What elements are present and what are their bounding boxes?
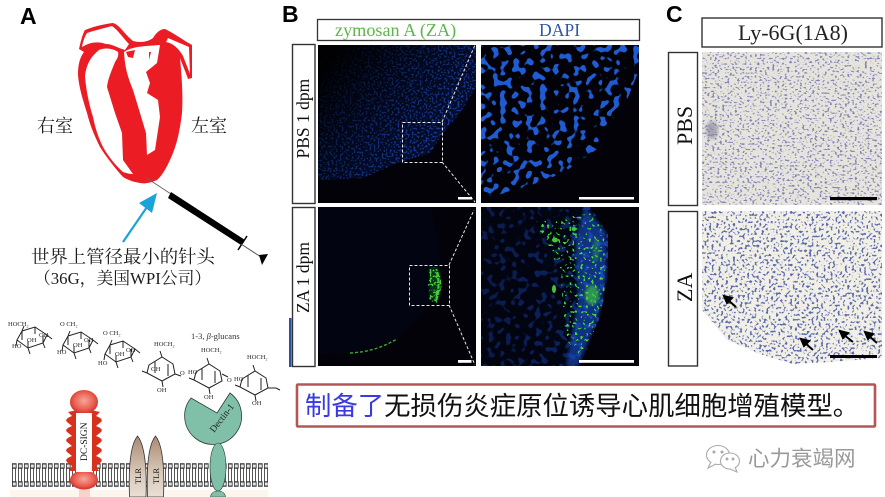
micrograph: PBS DAPI high magnification [481,45,639,203]
row label: ZA 1 dpm [289,208,315,367]
chemical structure: 1-3 beta-glucans: O CH₂ [103,330,121,337]
icon: chat bubbles [706,446,740,472]
chemical structure: 1-3 beta-glucans: OH [157,387,167,394]
watermark: 心力衰竭网 [748,447,856,471]
icon: syringe [145,177,268,265]
receptor: TLR: TLR [151,468,161,484]
chemical structure: 1-3 beta-glucans: OH [115,351,125,358]
arrows: positive cells [724,296,877,350]
chemical structure: 1-3 beta-glucans: HO [188,369,198,376]
chemical structure: 1-3 beta-glucans: OH [151,366,161,373]
chemical structure: 1-3 beta-glucans: 1-3, β-glucans [191,331,240,341]
cell membrane lipid bilayer [10,466,268,497]
row label: ZA [668,212,698,366]
chemical structure: 1-3 beta-glucans: OH [252,400,262,407]
row label: PBS: PBS [672,106,697,145]
chemical structure: 1-3 beta-glucans: HO [57,349,67,356]
zoom box and guide lines [402,45,475,202]
scale bar [458,360,472,363]
panel: beta-glucan receptors [8,321,280,497]
row label: ZA: ZA [672,273,697,302]
icon: heart cross-section [78,23,192,183]
chemical structure: 1-3 beta-glucans: O CH₂ [60,321,78,328]
chemical structure: 1-3 beta-glucans: OH [126,347,136,354]
panel B: fluorescence microscopy [282,1,640,367]
caption [31,247,216,288]
callout: conclusion [297,384,875,426]
chemical structure: 1-3 beta-glucans: O [180,370,185,377]
micrograph: Ly-6G PBS [702,52,882,205]
receptor: Dectin-1 [185,393,242,497]
label: right ventricle: 右室 [37,116,73,136]
chemical structure: 1-3 beta-glucans: OH [204,394,214,401]
receptor: DC-SIGN [66,390,102,497]
chemical structure: 1-3 beta-glucans: HO [98,360,108,367]
chemical structure: 1-3 beta-glucans: HOCH₂ [154,341,175,348]
zoom box and guide lines [410,210,475,365]
panel A: heart injection [20,3,268,288]
arrow: points to needle [123,193,157,242]
chemical structure: 1-3 beta-glucans: HO [12,343,22,350]
chemical structure: 1-3 beta-glucans: OH [27,337,37,344]
caption: （36G，美国WPI公司） [34,269,211,288]
green signal [350,266,442,354]
scale bar [830,197,877,200]
chemical structure: 1-3 beta-glucans: OH [73,342,83,349]
chemical structure: 1-3 beta-glucans: OH [84,337,94,344]
column header: Ly-6G(1A8): Ly-6G(1A8) [738,20,848,45]
scale bar [579,360,634,363]
micrograph: PBS low magnification [318,45,476,203]
chemical structure: 1-3 beta-glucans: HOCH₂ [8,321,29,328]
scale bar [579,197,634,200]
column header: DAPI [539,20,580,40]
column header [318,20,640,41]
micrograph: Ly-6G ZA [702,211,882,364]
panel letter C: C [666,1,683,27]
chemical structure: 1-3 beta-glucans: O [227,377,232,384]
row label: PBS 1 dpm [292,44,315,204]
receptor: TLR [129,436,164,497]
receptor: DC-SIGN: DC-SIGN [80,422,90,461]
chemical structure: 1-3 beta-glucans [8,321,280,407]
scale bar [830,355,877,358]
micrograph: ZA low magnification [318,207,476,366]
receptor: TLR: TLR [133,468,143,484]
chemical structure: 1-3 beta-glucans: OH [39,332,49,339]
watermark [706,446,856,472]
row label: PBS 1 dpm: PBS 1 dpm [293,78,313,158]
caption: 世界上管径最小的针头 [31,247,216,267]
row label: ZA 1 dpm: ZA 1 dpm [293,242,313,313]
scale bar [458,197,472,200]
chemical structure: 1-3 beta-glucans: HOCH₂ [247,354,268,361]
callout: conclusion: 制备了无损伤炎症原位诱导心肌细胞增殖模型。 [305,391,859,421]
panel letter B: B [282,1,299,27]
chemical structure: 1-3 beta-glucans: HOCH₂ [201,347,222,354]
receptor: Dectin-1: Dectin-1 [208,402,237,435]
panel C: immunohistochemistry [666,1,882,366]
chemical structure: 1-3 beta-glucans: HO [234,376,244,383]
label: left ventricle: 左室 [191,116,227,136]
column header: Ly-6G(1A8) [702,18,882,47]
row label: PBS [668,52,698,206]
column header: zymosan A (ZA) [335,20,456,41]
micrograph: ZA merge high magnification [481,207,639,366]
panel letter A: A [20,3,37,29]
